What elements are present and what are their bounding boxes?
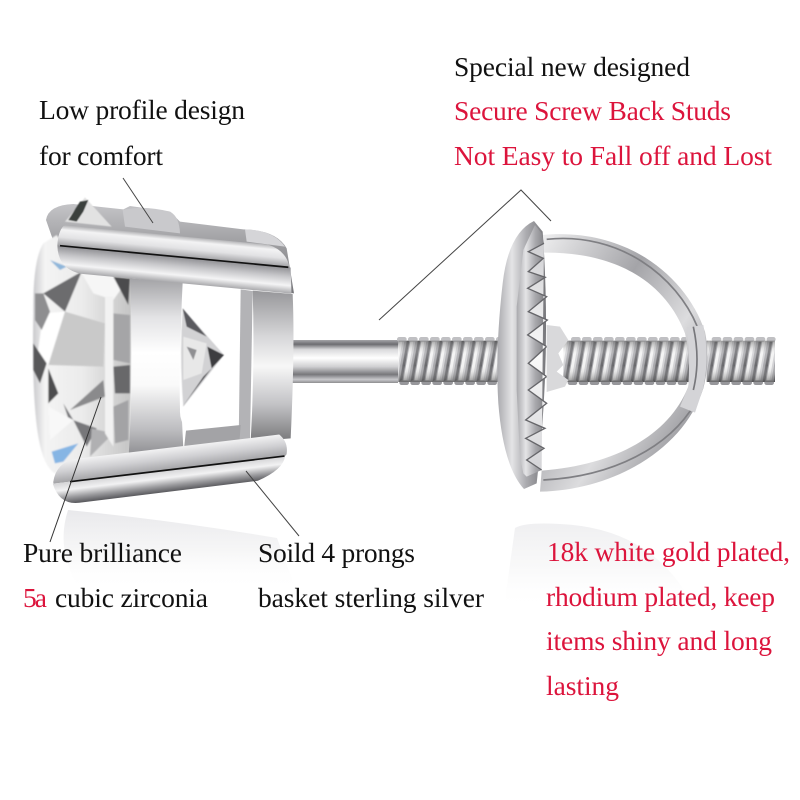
label: pure brilliance [23,537,208,613]
top front prong [55,224,296,294]
label: pure brilliance: Pure brilliance [23,537,182,568]
label: solid prongs [258,537,484,613]
diamond pavilion [181,308,224,407]
label: plating: items shiny and long [546,625,772,656]
thread segment 2 [563,339,692,383]
label: low profile [39,94,245,171]
reflection below earring [64,510,690,610]
label: plating [546,536,790,701]
label: solid prongs: basket sterling silver [258,582,484,613]
screw hub [547,325,568,392]
label: screw back [454,51,772,171]
bottom front prong [50,434,290,506]
diamond body [33,235,132,473]
label: screw back: Special new designed [454,51,690,82]
label: screw back: Not Easy to Fall off and Lost [454,140,772,171]
earring head: diamond and basket [33,197,296,506]
label: plating: rhodium plated, keep [546,581,775,612]
label: pure brilliance: cubic zirconia [55,582,208,613]
basket floor [184,425,241,448]
rear strut [239,289,253,443]
screw back and threaded post [398,221,775,492]
thread segment 1 [398,339,515,383]
dome ring [540,234,707,492]
label: solid prongs: Soild 4 prongs [258,537,415,568]
label: low profile: Low profile design [39,94,245,125]
thread segment 3 [707,339,775,383]
label: plating: 18k white gold plated, [547,536,790,567]
label: pure brilliance: 5a [23,582,47,613]
leader line: low profile [123,178,153,223]
toothed disc [497,221,547,489]
label: low profile: for comfort [39,140,163,171]
label: plating: lasting [546,670,619,701]
front strut [129,278,183,456]
label: screw back: Secure Screw Back Studs [454,95,731,126]
back prongs and basket top [46,204,294,293]
earring post [290,340,398,383]
diamond crown tip [65,197,112,227]
leader line: screw back [379,190,551,320]
leader line: solid prongs [246,471,299,536]
basket window [180,284,241,431]
leader line: pure brilliance [50,397,101,542]
